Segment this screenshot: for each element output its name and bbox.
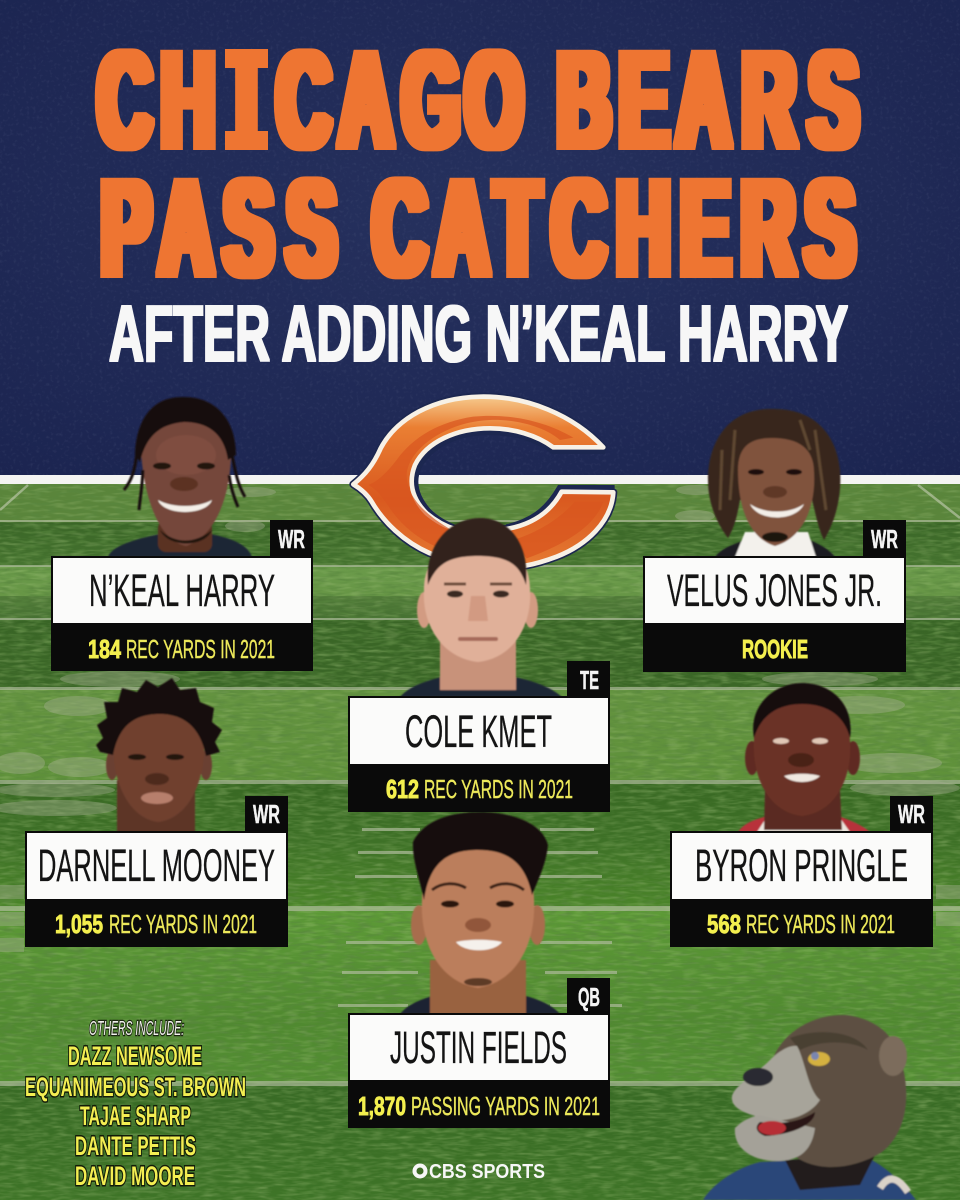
- title line 2: PASS CATCHERS: [101, 152, 855, 305]
- CBS Sports wordmark: CBS SPORTS: [429, 1161, 545, 1183]
- card: Byron Pringle: WR: [898, 799, 925, 829]
- card: N'Keal Harry: N’KEAL HARRY: [89, 565, 275, 616]
- others include list: EQUANIMEOUS ST. BROWN: [25, 1072, 246, 1102]
- player photo: Velus Jones Jr.: [708, 409, 840, 557]
- card: Velus Jones Jr.: [643, 520, 906, 672]
- card: Darnell Mooney: 1,055: [55, 909, 103, 939]
- card: Cole Kmet: REC YARDS IN 2021: [424, 774, 573, 804]
- card: N'Keal Harry: 184: [88, 634, 121, 664]
- navy header background: [0, 0, 960, 480]
- card: Cole Kmet: TE: [580, 665, 599, 695]
- others include list: OTHERS INCLUDE:: [89, 1018, 184, 1040]
- card: Darnell Mooney: DARNELL MOONEY: [38, 840, 275, 891]
- card: Byron Pringle: [670, 796, 933, 947]
- card: Velus Jones Jr.: ROOKIE: [742, 634, 808, 664]
- card: Darnell Mooney: [25, 796, 288, 947]
- player photo: Byron Pringle: [738, 683, 870, 832]
- player photo: Justin Fields: [400, 812, 560, 1014]
- card: N'Keal Harry: REC YARDS IN 2021: [126, 634, 275, 664]
- card: Cole Kmet: COLE KMET: [405, 706, 552, 757]
- card: Justin Fields: QB: [578, 982, 600, 1012]
- card: Velus Jones Jr.: WR: [871, 524, 898, 554]
- player photo: N'Keal Harry: [108, 397, 252, 557]
- others include list: TAJAE SHARP: [80, 1101, 191, 1131]
- card: N'Keal Harry: WR: [278, 524, 305, 554]
- others include list: DAZZ NEWSOME: [68, 1041, 202, 1071]
- card: Justin Fields: 1,870: [358, 1091, 406, 1121]
- card: N'Keal Harry: [51, 520, 313, 671]
- others include list: DAVID MOORE: [75, 1161, 195, 1191]
- card: Cole Kmet: 612: [386, 774, 419, 804]
- card: Justin Fields: PASSING YARDS IN 2021: [411, 1091, 600, 1121]
- Bears C logo: [353, 397, 615, 567]
- card: Byron Pringle: 568: [707, 909, 741, 939]
- title: [98, 24, 858, 305]
- card: Cole Kmet: [348, 661, 610, 812]
- others include list: [25, 1018, 246, 1191]
- player photo: Darnell Mooney: [96, 678, 222, 832]
- others include list: DANTE PETTIS: [75, 1131, 196, 1161]
- card: Justin Fields: [348, 978, 610, 1128]
- title line 1: CHICAGO BEARS: [98, 24, 858, 177]
- player photo: Cole Kmet: [400, 518, 562, 697]
- card: Darnell Mooney: REC YARDS IN 2021: [109, 909, 257, 939]
- card: Justin Fields: JUSTIN FIELDS: [390, 1022, 567, 1073]
- football field background: [0, 484, 960, 1200]
- white boundary line: [0, 475, 960, 484]
- mascot: Staley bear: [703, 1015, 916, 1200]
- card: Darnell Mooney: WR: [253, 799, 280, 829]
